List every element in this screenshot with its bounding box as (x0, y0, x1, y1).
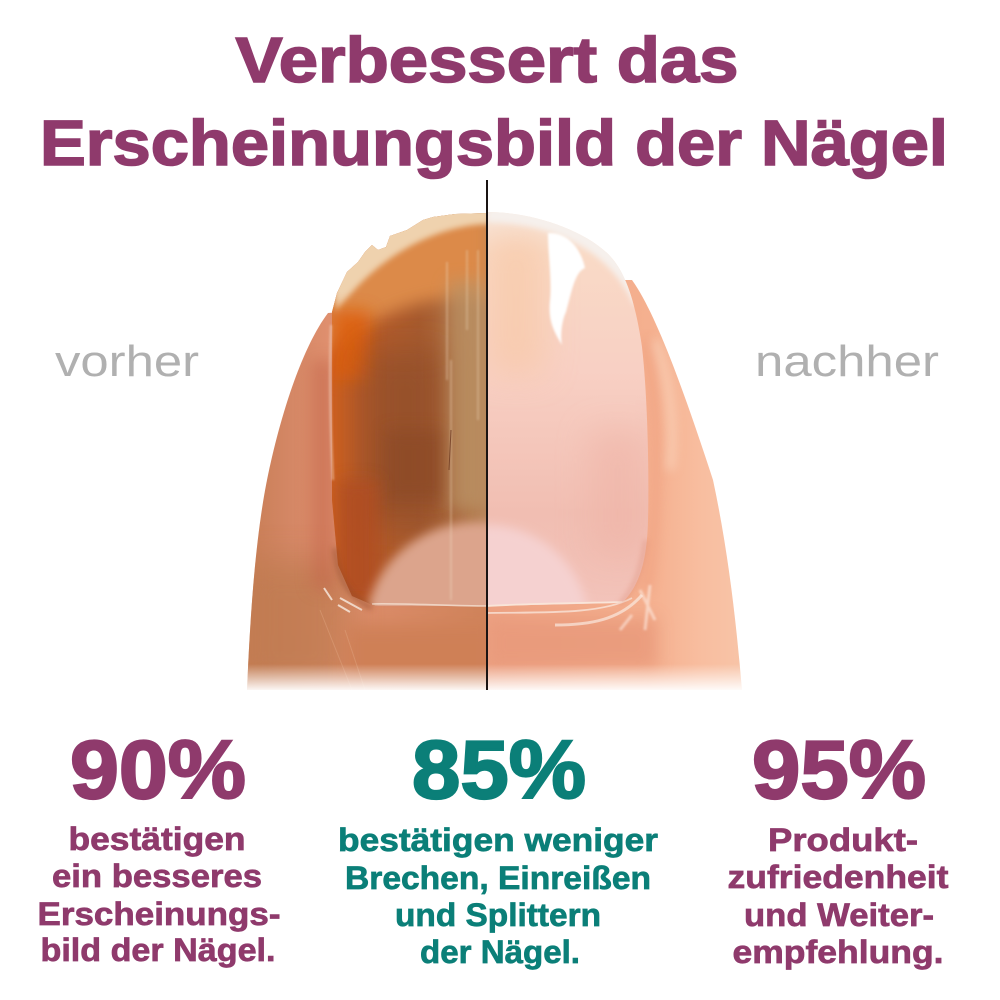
after half of finger (488, 212, 742, 690)
damaged nail (332, 213, 486, 606)
stat: 90% (38, 723, 280, 968)
stat: 85%: der Nägel. (420, 934, 580, 970)
title (40, 24, 948, 179)
title: Verbessert das (236, 24, 738, 96)
stat: 95%: 95% (752, 723, 926, 816)
photo: finger nail before and after (247, 180, 742, 690)
label: nachher: nachher (755, 337, 939, 386)
stat: 95%: zufriedenheit (728, 859, 949, 895)
stat: 85%: und Splittern (395, 897, 601, 933)
label: vorher: vorher (55, 337, 199, 386)
healthy nail (488, 212, 648, 606)
title: Erscheinungsbild der Nägel (40, 107, 948, 179)
stat: 90%: Erscheinungs- (38, 896, 280, 932)
stat: 90%: ein besseres (52, 858, 262, 894)
stat: 85%: bestätigen weniger (338, 822, 658, 858)
nail fold highlight (330, 325, 333, 480)
stat: 85% (338, 723, 658, 970)
stat: 95% (728, 723, 949, 970)
stat: 95%: Produkt- (768, 822, 918, 858)
stat: 90%: bestätigen (68, 821, 245, 857)
stat: 85%: 85% (412, 723, 586, 816)
before half of finger (247, 213, 486, 690)
bottom fade (235, 664, 755, 692)
stat: 90%: bild der Nägel. (40, 932, 276, 968)
stat: 95%: und Weiter- (744, 897, 934, 933)
divider line (486, 180, 488, 690)
stat: 85%: Brechen, Einreißen (345, 860, 651, 896)
stat: 95%: empfehlung. (732, 934, 944, 970)
stat: 90%: 90% (70, 723, 246, 816)
